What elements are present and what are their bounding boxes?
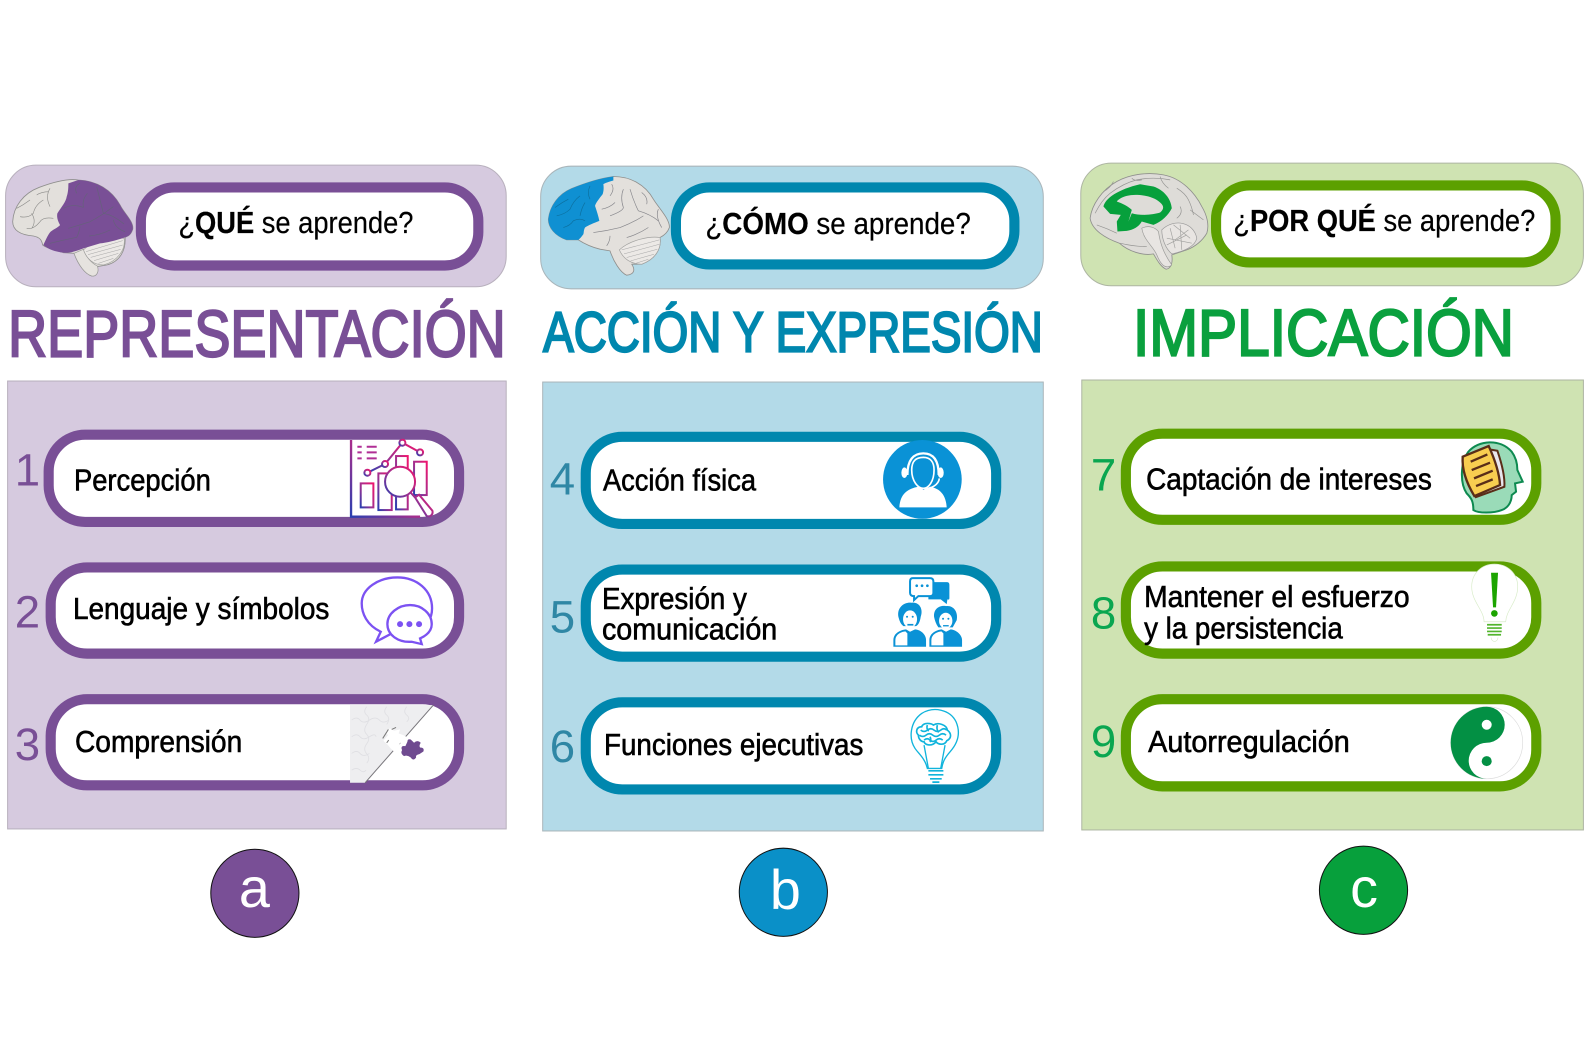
item: percepción	[49, 435, 459, 522]
item: mantener el esfuerzo y la persistencia: y la persistencia	[1144, 611, 1343, 645]
panel: representación items	[8, 381, 506, 829]
icon: puzzle	[350, 705, 433, 783]
item: acción física	[586, 437, 996, 524]
icon: chart and magnifier	[351, 440, 433, 517]
icon: head with book	[1462, 442, 1523, 513]
heading: implicación: IMPLICACIÓN	[1133, 296, 1514, 370]
question text: ¿CÓMO se aprende?	[705, 207, 971, 241]
badge: a: a	[239, 857, 270, 919]
question text: ¿POR QUÉ se aprende?	[1233, 204, 1535, 238]
number 4: 4	[550, 454, 575, 505]
heading: representación: REPRESENTACIÓN	[8, 297, 506, 371]
column c: implicación	[1081, 163, 1583, 934]
number 3: 3	[15, 719, 40, 770]
number 6: 6	[550, 721, 575, 772]
number 1: 1	[15, 444, 40, 495]
icon: yin yang	[1451, 707, 1523, 779]
badge: b: b	[770, 859, 801, 921]
item: acción física: Acción física	[603, 463, 756, 497]
icon: light bulb with brain	[911, 710, 958, 782]
item: mantener el esfuerzo y la persistencia: Mantener el esfuerzo	[1144, 580, 1410, 614]
icon: brain with blue frontal region	[548, 177, 669, 275]
heading: acción y expresión: ACCIÓN Y EXPRESIÓN	[543, 302, 1043, 365]
badge: a	[211, 849, 299, 937]
panel: acción y expresión items	[543, 382, 1043, 831]
panel: ¿cómo se aprende? header	[541, 166, 1043, 289]
item: autorregulación: Autorregulación	[1148, 725, 1350, 759]
item: expresión y comunicación: Expresión y	[602, 582, 748, 616]
column b: acción y expresión	[541, 166, 1043, 936]
icon: person with headset	[883, 440, 962, 519]
number 9: 9	[1091, 716, 1116, 767]
icon: brain with purple posterior region	[13, 180, 133, 276]
icon: sagittal brain with green limbic band	[1090, 174, 1208, 269]
item: comprensión: Comprensión	[75, 725, 242, 759]
item: captación de intereses: Captación de intereses	[1146, 462, 1432, 496]
question text: ¿QUÉ se aprende?	[178, 206, 413, 240]
item: funciones ejecutivas	[586, 702, 996, 789]
number 7: 7	[1091, 449, 1116, 500]
item: captación de intereses	[1126, 434, 1536, 520]
panel: ¿qué se aprende? header	[6, 165, 506, 287]
question pill	[676, 187, 1014, 264]
item: funciones ejecutivas: Funciones ejecutivas	[604, 728, 863, 762]
panel: implicación items	[1082, 380, 1583, 830]
item: lenguaje y símbolos	[51, 567, 459, 654]
badge: c: c	[1350, 857, 1378, 919]
item: autorregulación	[1126, 699, 1536, 786]
item: lenguaje y símbolos: Lenguaje y símbolos	[73, 592, 329, 626]
panel: ¿por qué se aprende? header	[1081, 163, 1583, 286]
question pill	[1216, 185, 1556, 262]
number 2: 2	[15, 586, 40, 637]
question pill	[141, 187, 478, 266]
icon: two people talking	[893, 578, 962, 647]
number 5: 5	[550, 591, 575, 642]
column a: representación	[6, 165, 506, 937]
icon: speech bubbles	[362, 577, 432, 644]
item: percepción: Percepción	[74, 463, 211, 497]
badge: b	[739, 848, 827, 936]
item: comprensión	[51, 699, 459, 785]
icon: light bulb with exclamation mark	[1472, 564, 1518, 641]
item: mantener el esfuerzo y la persistencia	[1126, 564, 1536, 654]
item: expresión y comunicación	[586, 570, 996, 657]
number 8: 8	[1091, 587, 1116, 638]
item: expresión y comunicación: comunicación	[602, 612, 777, 646]
badge: c	[1319, 846, 1408, 934]
